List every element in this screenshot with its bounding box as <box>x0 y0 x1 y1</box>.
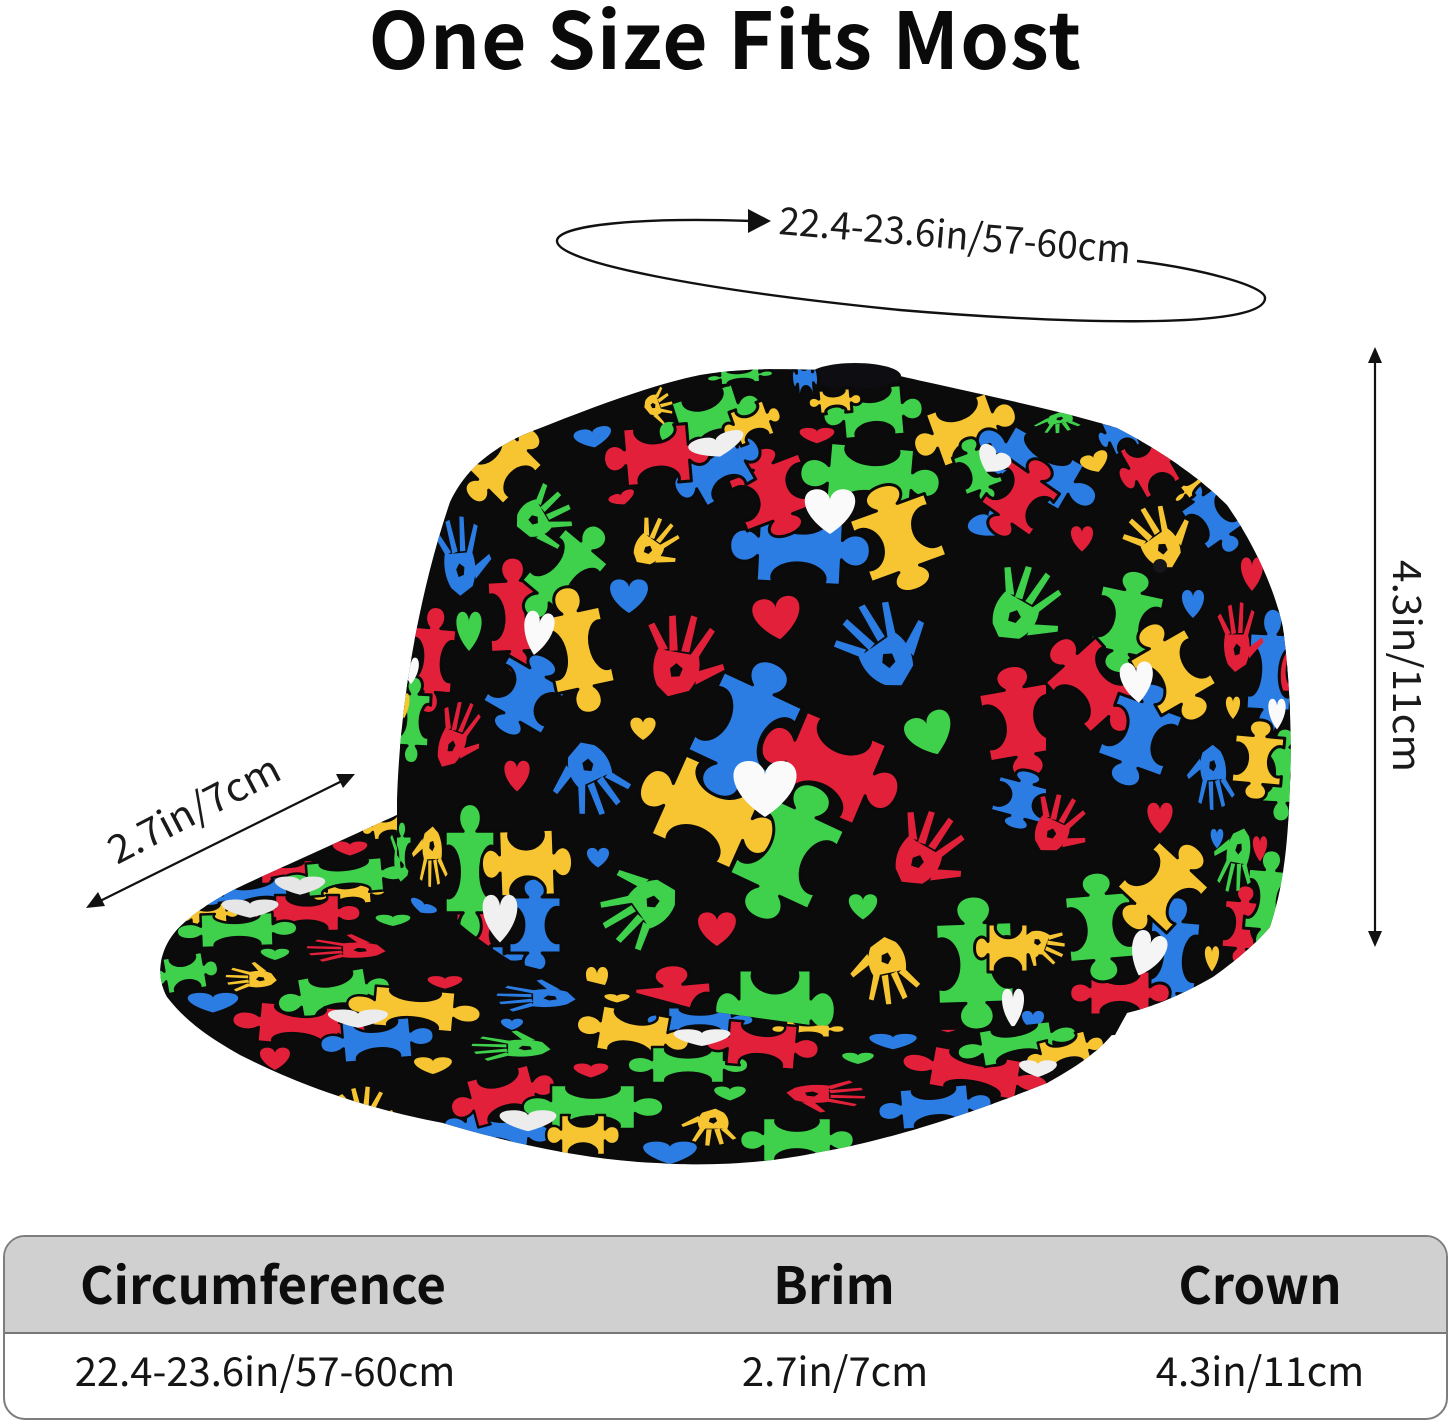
centre puzzle cluster <box>640 662 898 919</box>
header: crown: Crown <box>1178 1245 1342 1319</box>
right side pieces <box>1222 608 1291 963</box>
brim middle left puzzle cluster <box>233 968 480 1062</box>
crown handprints <box>411 384 1263 1011</box>
value: brim: 2.7in/7cm <box>742 1340 928 1398</box>
top circumference measurement: 22.4-23.6in/57-60cm <box>777 190 1133 274</box>
right puzzle cluster <box>1044 572 1215 786</box>
brim length measurement <box>86 739 355 908</box>
eyelet <box>1153 559 1167 573</box>
crown height measurement: 4.3in/11cm <box>1381 560 1437 772</box>
table header row <box>5 1237 1446 1334</box>
cap crown <box>392 357 1305 1068</box>
brim front puzzle cluster <box>573 1001 845 1083</box>
brim left puzzle cluster <box>160 815 408 993</box>
value: crown: 4.3in/11cm <box>1156 1340 1364 1398</box>
size table <box>3 1235 1448 1420</box>
brim hearts <box>188 842 962 1100</box>
lower right puzzle cluster <box>1066 843 1207 1014</box>
brim print pattern <box>149 810 1108 1164</box>
lower centre pieces <box>636 898 1044 1028</box>
brim bottom puzzle cluster <box>442 1059 854 1164</box>
upper puzzle cluster <box>730 444 945 590</box>
crown print pattern <box>392 357 1305 1068</box>
header: brim: Brim <box>773 1245 895 1319</box>
brim right puzzle cluster <box>877 1015 1108 1132</box>
brim handprints <box>226 826 865 1146</box>
brim length measurement: 2.7in/7cm <box>97 739 289 876</box>
left puzzle cluster <box>484 526 614 735</box>
header: circumference: Circumference <box>80 1245 446 1319</box>
value: circumference: 22.4-23.6in/57-60cm <box>75 1340 455 1398</box>
front panel puzzle cluster <box>446 805 572 970</box>
upper right puzzle cluster <box>810 386 1242 552</box>
far left pieces <box>397 608 456 868</box>
crown hearts <box>456 425 1267 995</box>
top button <box>809 363 901 389</box>
cap brim <box>149 810 1127 1164</box>
top circumference measurement <box>557 190 1265 321</box>
upper left puzzle cluster <box>466 369 820 505</box>
crown height measurement <box>1368 347 1437 947</box>
mid right pieces on seam <box>980 667 1046 829</box>
